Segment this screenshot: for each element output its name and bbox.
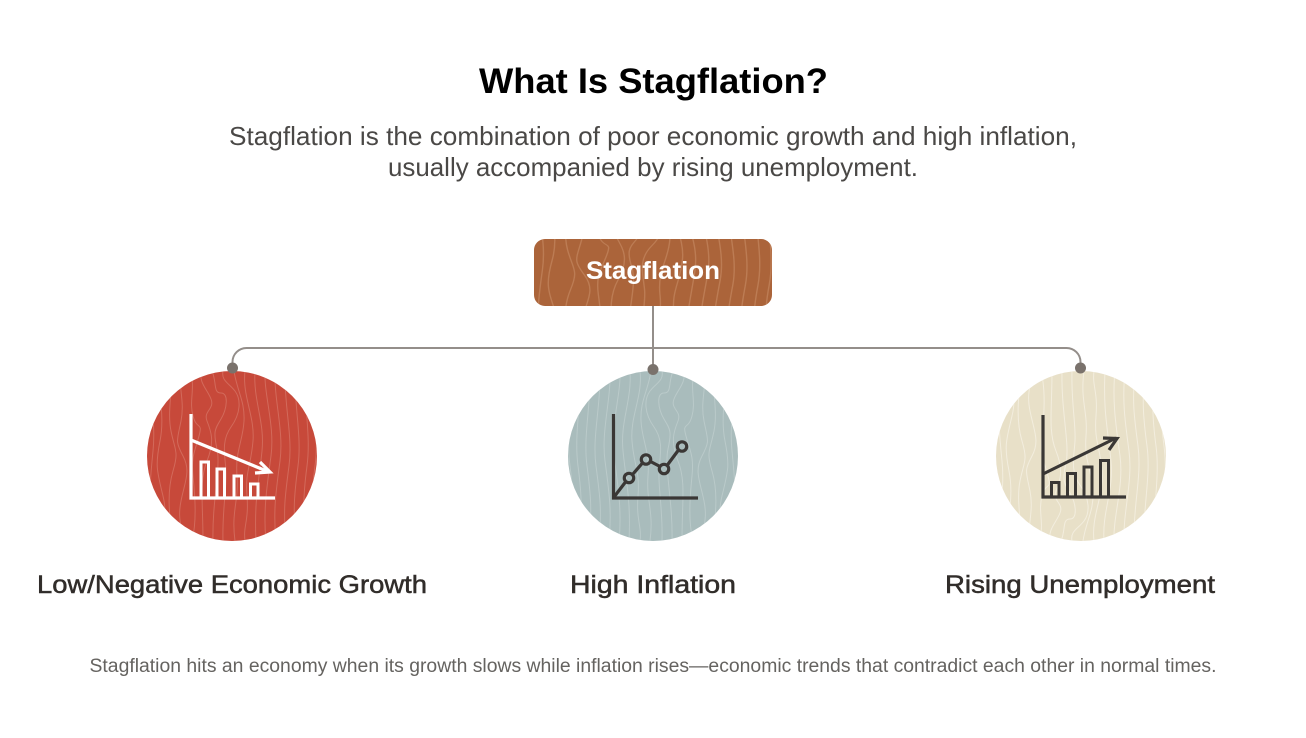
subtitle: Stagflation is the combination of poor economic growth and high inflation, <box>229 121 1077 151</box>
label: High Inflation <box>570 571 736 599</box>
title: What Is Stagflation? <box>479 62 828 101</box>
box label: Stagflation <box>586 257 720 285</box>
subtitle: usually accompanied by rising unemployment. <box>388 152 918 182</box>
icon: rising line chart <box>614 414 698 498</box>
label: Low/Negative Economic Growth <box>37 571 427 599</box>
cream textured circle <box>996 371 1166 541</box>
red textured circle <box>147 371 317 541</box>
subtitle <box>229 121 1077 182</box>
icon: falling bar chart <box>191 414 275 498</box>
label: Rising Unemployment <box>945 571 1215 599</box>
icon: rising bar chart <box>1043 415 1126 497</box>
connector lines <box>227 306 1086 375</box>
panel: low or negative economic growth <box>37 371 427 599</box>
node: Stagflation box <box>534 239 772 306</box>
footnote: Stagflation hits an economy when its growth slows while inflation rises—economic trends that contradict each other in normal times. <box>90 656 1216 677</box>
teal textured circle <box>568 371 738 541</box>
panel: high inflation <box>568 371 738 599</box>
panel: rising unemployment <box>945 371 1215 599</box>
